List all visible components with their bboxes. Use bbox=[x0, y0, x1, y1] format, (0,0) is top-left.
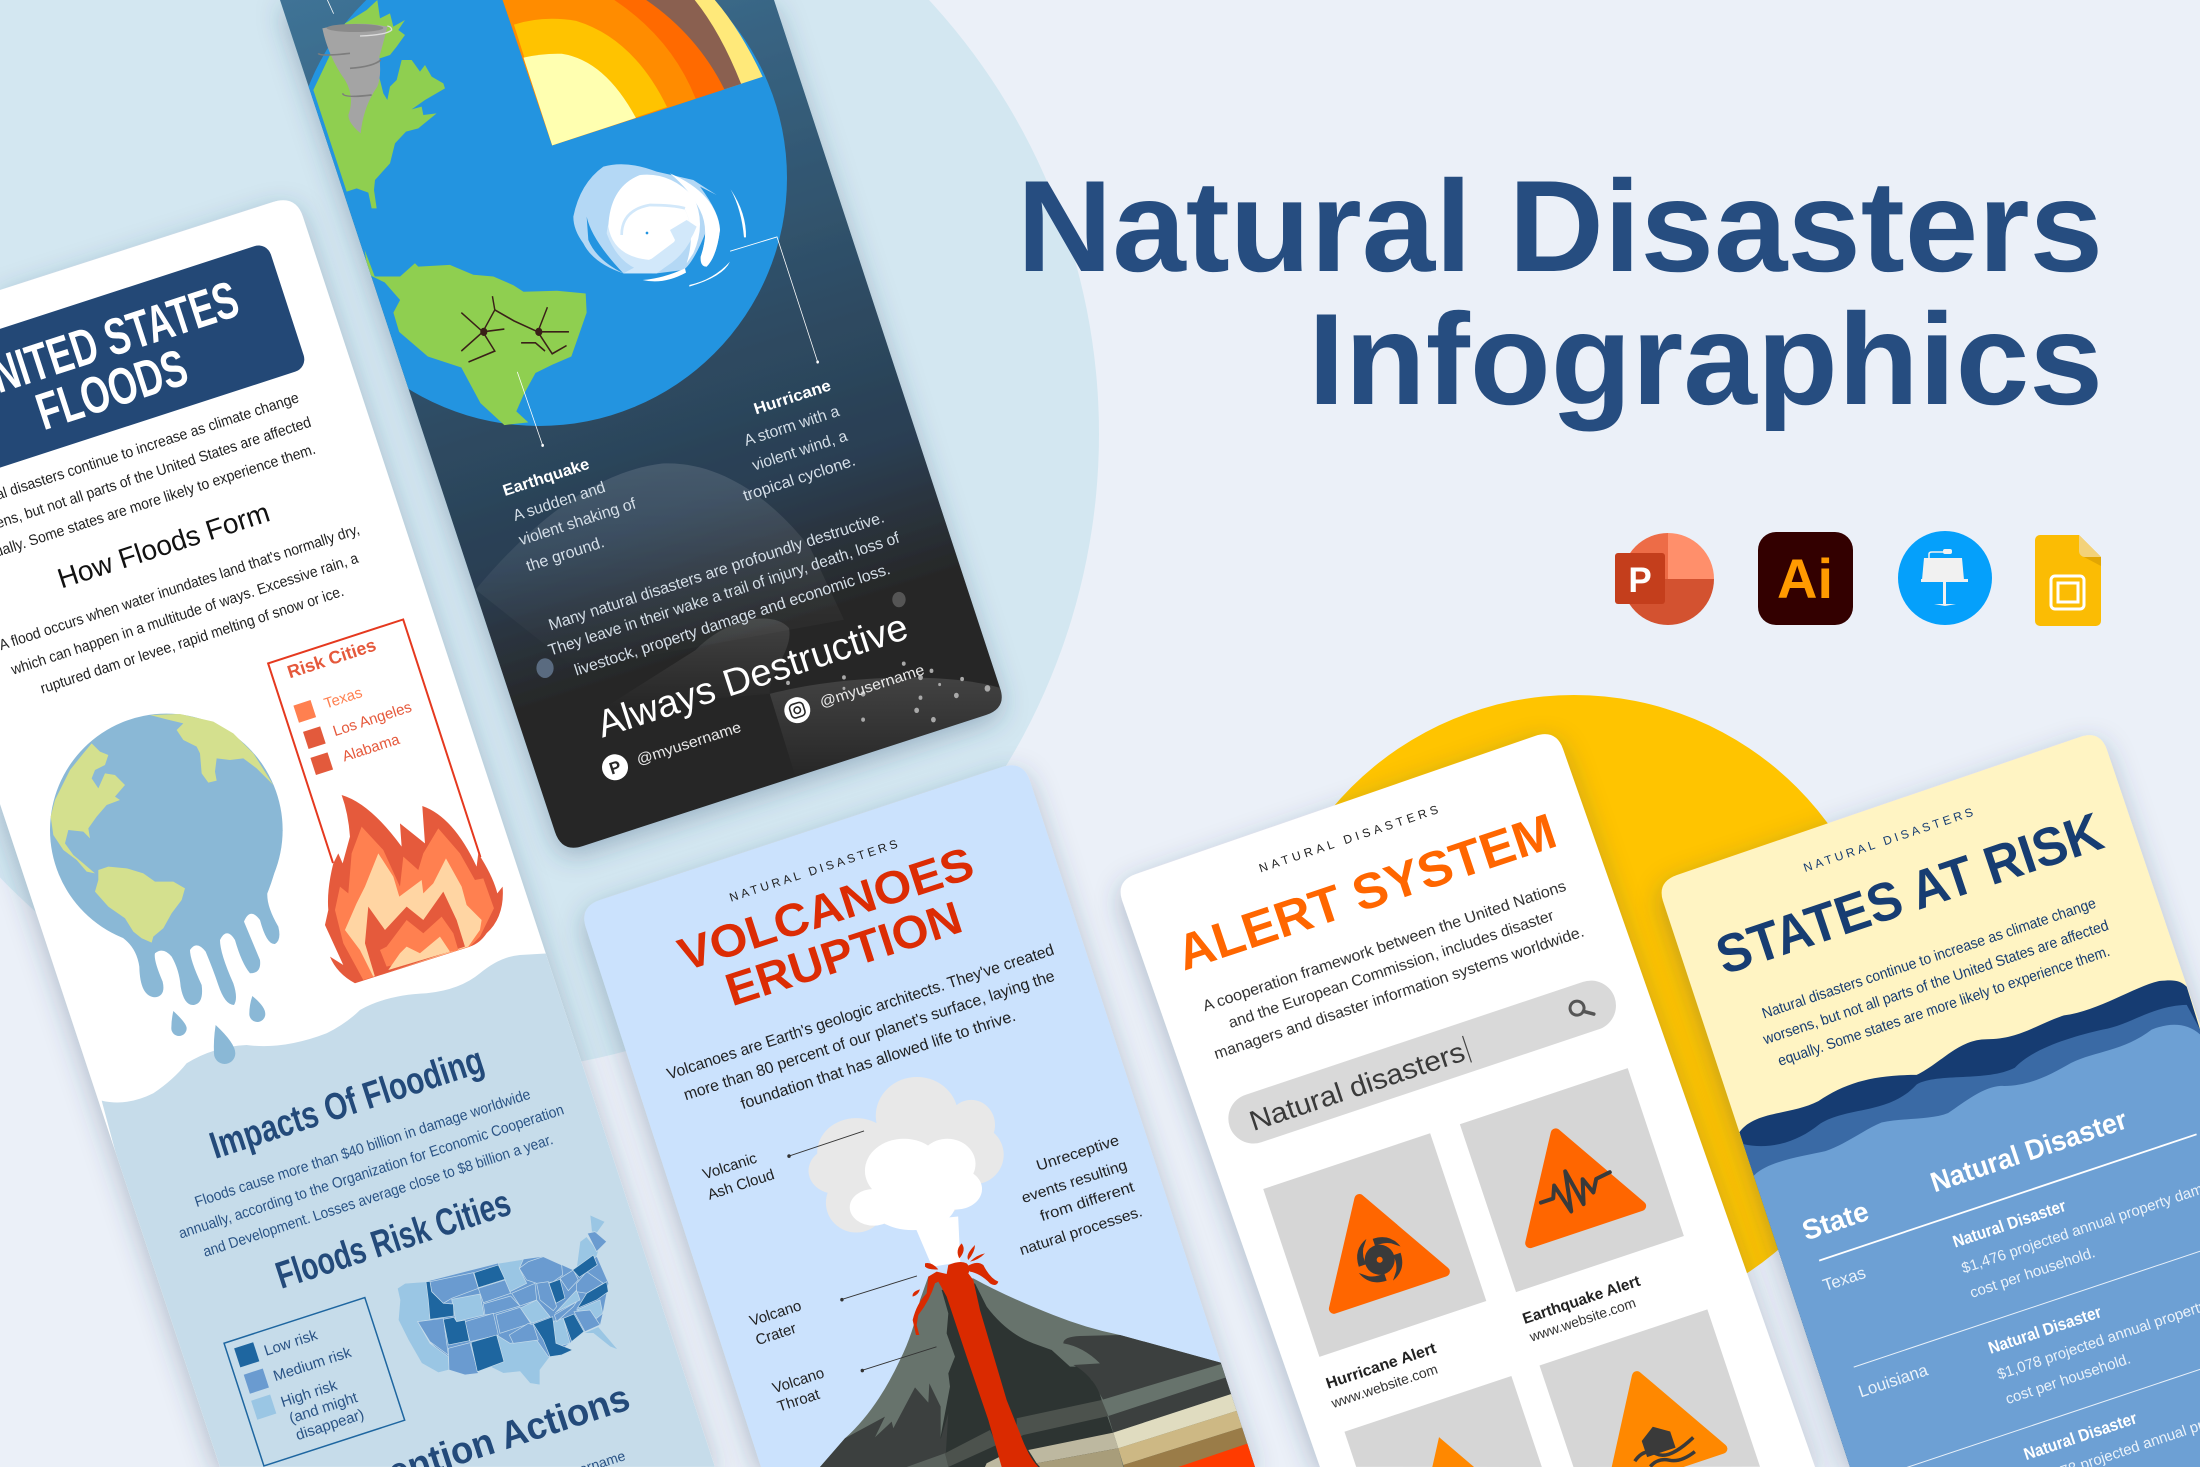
intro paragraph: Volcanoes are Earth's geologic architects. They've created bbox=[665, 942, 1056, 1083]
card background bbox=[584, 765, 1255, 1467]
illustration: melting globe bbox=[50, 714, 283, 1064]
heading: Alert System: ALERT SYSTEM bbox=[1170, 803, 1563, 981]
icon: Illustrator: Ai bbox=[1777, 547, 1833, 610]
heading: Always Destructive: Always Destructive bbox=[592, 606, 913, 746]
search bar: Natural disasters bbox=[1245, 1036, 1469, 1137]
icon: tornado bbox=[318, 24, 392, 133]
label: Volcanic Ash Cloud bbox=[699, 1146, 777, 1204]
text: lower sections bbox=[150, 1021, 673, 1467]
tile: Earthquake Alert: Earthquake Alert bbox=[1520, 1273, 1643, 1328]
table row: Texas: cost per household. bbox=[1968, 1244, 2097, 1302]
table row: Louisiana bbox=[1856, 1244, 2200, 1467]
panel: States At Risk bbox=[1662, 735, 2200, 1467]
legend: risk levels: High risk bbox=[279, 1377, 340, 1411]
water waves bbox=[1720, 980, 2200, 1467]
legend: Risk Cities: Texas bbox=[322, 684, 364, 713]
lava bbox=[913, 1243, 1038, 1467]
paragraph: livestock, property damage and economic loss. bbox=[572, 561, 892, 680]
heading: How Floods Form: How Floods Form bbox=[54, 497, 273, 594]
earth illustration bbox=[291, 0, 1002, 790]
tile: flood alert bbox=[1540, 1309, 1760, 1467]
panel: United States Floods bbox=[0, 200, 720, 1467]
impacts paragraph: and Development. Losses average close to $8 billion a year. bbox=[201, 1131, 555, 1261]
table header: Natural Disaster bbox=[1927, 1104, 2131, 1198]
table row: Louisiana: cost per household. bbox=[2003, 1350, 2133, 1408]
tile: Hurricane Alert bbox=[1259, 1133, 1504, 1411]
land: North America bbox=[313, 0, 445, 208]
connector lines bbox=[327, 0, 819, 446]
icon: Illustrator bbox=[1758, 532, 1853, 625]
heading: Impacts Of Flooding: Impacts Of Flooding bbox=[205, 1040, 489, 1168]
intro paragraph: equally. Some states are more likely to experience them. bbox=[1776, 943, 2112, 1070]
table row: Louisiana: Natural Disaster bbox=[1986, 1302, 2104, 1358]
card background bbox=[0, 200, 715, 1467]
title: Infographics bbox=[1308, 286, 2103, 432]
icon: Pinterest handle: @myusername bbox=[634, 719, 743, 769]
ash cloud bbox=[809, 1077, 1004, 1232]
eyebrow: NATURAL DISASTERS bbox=[1257, 802, 1440, 875]
callout: Earthquake bbox=[502, 461, 636, 571]
heading: Floods Risk Cities: Floods Risk Cities bbox=[271, 1182, 516, 1298]
icon: PowerPoint bbox=[1615, 533, 1714, 625]
table row: Texas bbox=[1820, 1138, 2200, 1368]
callout: Hurricane bbox=[742, 382, 855, 500]
legend: risk levels bbox=[224, 1298, 405, 1466]
tile: Hurricane Alert: www.website.com bbox=[1328, 1361, 1440, 1411]
eruption plume bbox=[850, 1139, 982, 1267]
paragraph: Many natural disasters are profoundly destructive. bbox=[547, 509, 887, 634]
callout: Hurricane: Hurricane bbox=[752, 377, 833, 418]
table header bbox=[1797, 1084, 2197, 1262]
label: Volcanic Ash Cloud: Volcanic bbox=[701, 1150, 759, 1183]
impacts paragraph: annually, according to the Organization for Economic Cooperation bbox=[177, 1101, 566, 1242]
card content bbox=[1153, 768, 1770, 1467]
flood paragraph: which can happen in a multitude of ways. Excessive rain, a bbox=[8, 550, 361, 679]
label: eruption description bbox=[994, 1132, 1145, 1259]
icon: PowerPoint: P bbox=[1628, 561, 1652, 600]
heading: States At Risk: STATES AT RISK bbox=[1709, 802, 2110, 986]
heading: Volcanoes Eruption bbox=[672, 837, 995, 1027]
label: eruption description: events resulting bbox=[1019, 1157, 1129, 1207]
tile: Hurricane Alert: Hurricane Alert bbox=[1324, 1340, 1438, 1393]
icon: cracks bbox=[461, 296, 569, 362]
intro paragraph: worsens, but not all parts of the United States are affected bbox=[1760, 917, 2111, 1049]
card text bbox=[1692, 758, 2200, 1467]
label: eruption description: from different bbox=[1038, 1178, 1137, 1225]
heading: Volcanoes Eruption: VOLCANOES bbox=[672, 837, 980, 981]
intro paragraph: managers and disaster information systems worldwide. bbox=[1212, 924, 1586, 1063]
title: Natural Disasters bbox=[1017, 153, 2103, 299]
legend: Risk Cities: Alabama bbox=[340, 731, 402, 765]
label: Volcano Crater: Crater bbox=[754, 1320, 798, 1349]
callout: Hurricane: tropical cyclone. bbox=[741, 453, 858, 505]
label: Volcano Crater: Volcano bbox=[747, 1297, 804, 1330]
intro paragraph: more than 80 percent of our planet's surface, laying the bbox=[682, 968, 1057, 1104]
paragraph: They leave in their wake a trail of injury, death, loss of bbox=[546, 530, 902, 660]
intro paragraph bbox=[1196, 877, 1586, 1063]
flood paragraph: ruptured dam or levee, rapid melting of snow or ice. bbox=[38, 583, 346, 697]
panel: Volcanoes Eruption bbox=[584, 765, 1260, 1467]
legend: Risk Cities bbox=[268, 619, 480, 901]
label: eruption description: Unreceptive bbox=[1034, 1132, 1121, 1175]
flood paragraph: A flood occurs when water inundates land that's normally dry, bbox=[0, 521, 362, 654]
illustration: flame bbox=[325, 795, 503, 983]
callout: Hurricane: A storm with a bbox=[742, 403, 842, 450]
icon: Pinterest handle bbox=[602, 724, 741, 780]
legend: risk levels: Low risk bbox=[262, 1326, 320, 1360]
land: South America bbox=[365, 250, 587, 425]
card text bbox=[502, 382, 924, 780]
intro paragraph: and the European Commission, includes disaster bbox=[1226, 907, 1556, 1032]
label connector lines bbox=[788, 1131, 936, 1372]
tile: Earthquake Alert bbox=[1458, 1068, 1701, 1345]
panel: Alert System bbox=[1121, 734, 1815, 1467]
label: Volcano Throat: Throat bbox=[775, 1386, 823, 1416]
callout: Earthquake: violent shaking of bbox=[517, 495, 639, 549]
mountain bbox=[820, 1243, 1260, 1467]
legend: Risk Cities: Risk Cities bbox=[285, 635, 379, 682]
callout: Earthquake: Earthquake bbox=[501, 456, 592, 500]
table row: Louisiana: Louisiana bbox=[1856, 1360, 1931, 1401]
card background bbox=[280, 0, 1002, 848]
illustration: US risk map bbox=[397, 1215, 618, 1385]
legend: risk levels: Medium risk bbox=[271, 1344, 354, 1385]
background circle: light blue bbox=[0, 0, 1099, 1073]
wave background bbox=[102, 953, 720, 1467]
label: eruption description: natural processes. bbox=[1017, 1203, 1144, 1259]
eyebrow: NATURAL DISASTERS bbox=[1802, 805, 1975, 875]
title banner: FLOODS bbox=[29, 339, 195, 442]
tile: lower left alert bbox=[1344, 1376, 1542, 1467]
eyebrow: NATURAL DISASTERS bbox=[728, 837, 899, 905]
search bar bbox=[1222, 974, 1623, 1150]
icon: Keynote bbox=[1898, 531, 1992, 625]
callout: Earthquake: A sudden and bbox=[511, 479, 608, 525]
title banner bbox=[0, 242, 308, 490]
table row: Texas: Natural Disaster bbox=[1950, 1196, 2069, 1252]
background circle: yellow bbox=[1259, 695, 1889, 1325]
icon: Pinterest handle: P bbox=[607, 757, 624, 779]
heading: Volcanoes Eruption: ERUPTION bbox=[719, 891, 968, 1016]
table header: State bbox=[1798, 1195, 1873, 1246]
callout: Earthquake: the ground. bbox=[524, 534, 607, 575]
earth layers wedge bbox=[493, 0, 763, 145]
impacts paragraph: Floods cause more than $40 billion in damage worldwide bbox=[193, 1086, 533, 1211]
label: Volcanic Ash Cloud: Ash Cloud bbox=[706, 1166, 777, 1204]
table row: Texas: Texas bbox=[1820, 1263, 1868, 1295]
title bbox=[1017, 153, 2103, 432]
icon: hurricane bbox=[573, 164, 746, 287]
icon: Instagram handle bbox=[784, 667, 924, 724]
legend: risk levels: (and might bbox=[287, 1389, 361, 1427]
intro paragraph: Natural disasters continue to increase as climate change bbox=[1760, 895, 2098, 1022]
card background bbox=[1121, 734, 1815, 1467]
tile: Earthquake Alert: www.website.com bbox=[1527, 1294, 1638, 1345]
volcano illustration bbox=[788, 1077, 1260, 1467]
icon: Instagram handle: @myusername bbox=[818, 661, 927, 711]
intro paragraph: foundation that has allowed life to thrive. bbox=[739, 1008, 1018, 1113]
text: card header and body bbox=[0, 238, 480, 984]
table row: third state: Natural Disaster bbox=[2021, 1408, 2140, 1464]
intro paragraph: A cooperation framework between the United Nations bbox=[1201, 878, 1569, 1015]
card background bbox=[1662, 735, 2200, 1467]
table bbox=[1797, 1072, 2200, 1467]
decorative hill and dots bbox=[476, 463, 1002, 779]
icon: Google Slides bbox=[2035, 535, 2101, 626]
card text bbox=[619, 800, 1168, 1416]
label: Volcano Throat: Volcano bbox=[770, 1364, 826, 1397]
callout: Hurricane: violent wind, a bbox=[750, 428, 850, 475]
legend: Risk Cities: Los Angeles bbox=[331, 699, 414, 740]
label: Volcano Crater bbox=[747, 1297, 810, 1349]
legend: risk levels: disappear) bbox=[294, 1406, 366, 1444]
label: Volcano Throat bbox=[769, 1364, 832, 1416]
